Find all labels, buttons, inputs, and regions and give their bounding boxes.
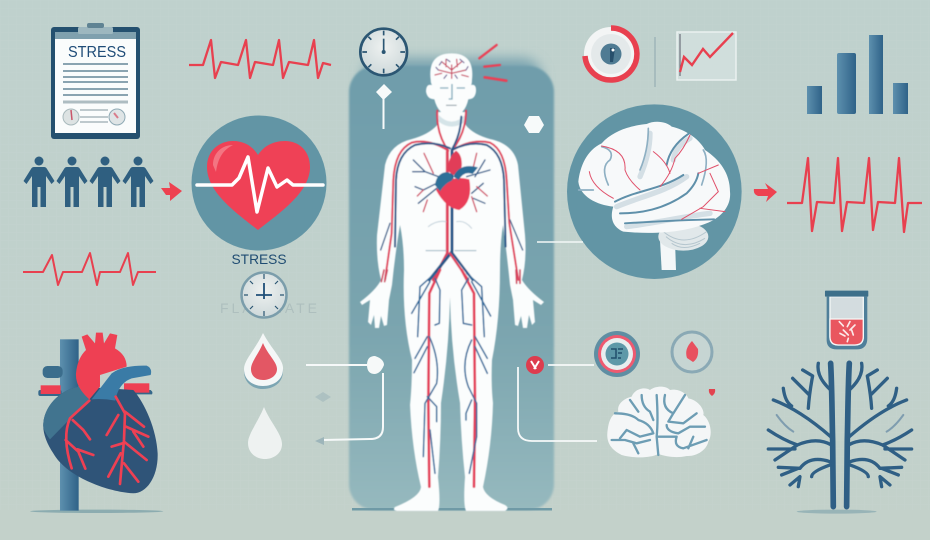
report gauges: [63, 109, 125, 125]
head: [426, 45, 506, 127]
heading: clipboard stress label: STRESS: [68, 44, 126, 61]
icon: white marker diamond: [524, 116, 544, 133]
icon: brain network in head: [435, 59, 468, 78]
vessels: legs: [381, 270, 520, 487]
stress rays: [479, 45, 506, 81]
chart: ECG trace top: [189, 40, 331, 78]
icon: small brain: [607, 387, 711, 457]
chart: ECG trace right: [787, 158, 922, 232]
icon: row of people: [24, 156, 154, 207]
icon: brain in circle: [567, 104, 742, 279]
icon: small clock: [242, 272, 286, 318]
icon: test jar: [825, 291, 868, 349]
icon: white drop: [248, 407, 282, 459]
icon: anatomical heart lower left: [30, 333, 163, 513]
arrow: up arrow under clock: [376, 84, 392, 129]
divider: [654, 37, 656, 87]
icon: gauge: [584, 27, 638, 81]
icon: red blood drop: [244, 333, 283, 389]
icon: ring with red drop: [672, 332, 712, 372]
connector: brain line: [537, 241, 583, 243]
arrow: brain to pulse: [754, 183, 777, 202]
chart: bar chart: [807, 35, 908, 114]
icon: anatomical heart: [435, 151, 478, 210]
icon: red x node: [526, 356, 544, 374]
report lines: [63, 64, 128, 122]
icon: branching vessel tree: [768, 363, 912, 514]
connector: left upper line with node: [306, 356, 384, 440]
vessels: upper body: [381, 111, 523, 280]
label: stress: STRESS: [232, 251, 286, 267]
arrow: people to heart: [161, 182, 182, 201]
faded arrows: [315, 392, 331, 445]
faded label behind clock: FLAT RATE: [220, 300, 317, 316]
chart: rising line in box: [677, 32, 736, 80]
body silhouette: [360, 112, 544, 511]
connector: right lower bracket: [518, 365, 597, 441]
icon: heart with pulse in circle: [192, 116, 326, 250]
icon: small red dot: [709, 389, 715, 396]
panel: central body backdrop: [349, 58, 554, 510]
figure: human body with circulatory system: [360, 45, 544, 511]
icon: target badge: [594, 331, 640, 377]
icon: clipboard with stress report: [51, 23, 140, 139]
icon: wall clock above arrow: [360, 29, 407, 75]
chart: ECG trace left: [23, 253, 156, 285]
